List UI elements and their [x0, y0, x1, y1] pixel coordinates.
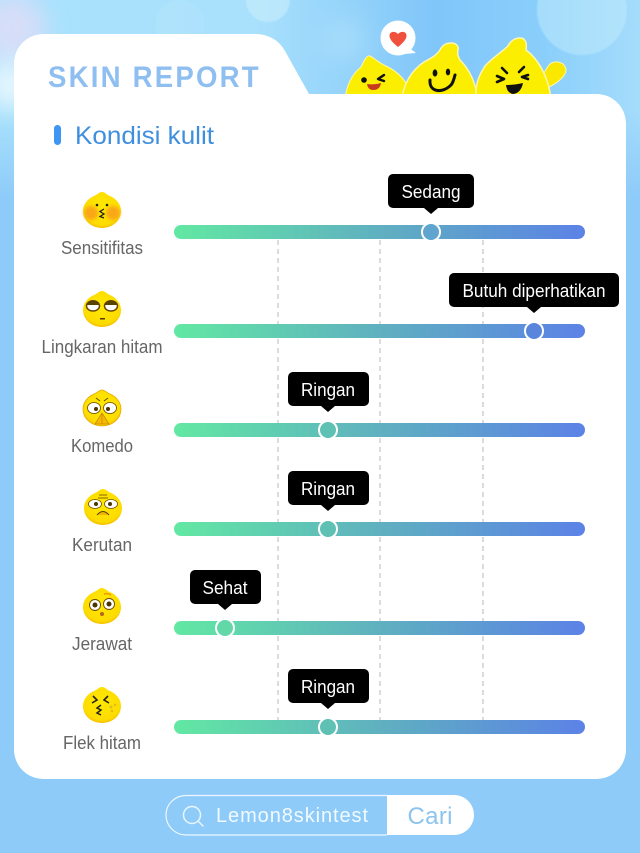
icon: magnifier	[184, 806, 203, 826]
row: Sensitifitas	[61, 174, 585, 258]
tooltip: Sehat	[190, 570, 261, 610]
slider track	[174, 324, 585, 338]
icon: tired eyes face	[83, 291, 121, 327]
icon: heart speech bubble	[380, 20, 416, 56]
mascot: smiling lemon	[402, 43, 478, 100]
icon: wrinkled worried face	[84, 489, 122, 525]
label: Kerutan	[72, 535, 132, 555]
slider track	[174, 621, 585, 635]
heading: Kondisi kulit: Kondisi kulit	[75, 122, 214, 150]
search button: Cari	[408, 803, 452, 830]
icon: squinting spotted face	[83, 687, 121, 723]
search text: Lemon8skintest	[216, 805, 368, 827]
tooltip: Butuh diperhatikan: Butuh diperhatikan	[462, 281, 606, 301]
tooltip: Sehat: Sehat	[202, 578, 248, 598]
label: Lingkaran hitam	[42, 337, 162, 357]
label: Flek hitam	[63, 733, 141, 753]
label: Komedo	[71, 436, 133, 456]
row: Flek hitam	[63, 669, 585, 753]
tooltip: Ringan	[288, 471, 369, 511]
slider thumb	[319, 421, 337, 439]
tooltip: Butuh diperhatikan	[449, 273, 619, 313]
slider track	[174, 720, 585, 734]
slider thumb	[525, 322, 543, 340]
search input outline	[166, 796, 387, 835]
label: Sensitifitas	[61, 238, 143, 258]
row: Jerawat	[72, 570, 585, 654]
search button	[387, 795, 474, 835]
slider thumb	[319, 718, 337, 736]
slider track	[174, 225, 585, 239]
tooltip: Sedang	[388, 174, 474, 214]
mascot: winking lemon	[345, 56, 407, 100]
background	[0, 0, 640, 172]
slider thumb	[216, 619, 234, 637]
tooltip: Sedang: Sedang	[402, 182, 460, 202]
icon: hands on nose face	[83, 390, 121, 426]
tooltip: Ringan: Ringan	[301, 380, 355, 400]
slider track	[174, 423, 585, 437]
scale grid lines	[278, 240, 483, 720]
tooltip: Ringan: Ringan	[301, 479, 355, 499]
row: Lingkaran hitam	[42, 273, 619, 357]
search bar	[166, 795, 474, 835]
title: SKIN REPORT	[48, 61, 259, 94]
mascot: laughing lemon waving	[476, 38, 566, 100]
tooltip: Ringan: Ringan	[301, 677, 355, 697]
tooltip: Ringan	[288, 669, 369, 709]
slider thumb	[319, 520, 337, 538]
icon: wide-eyed face	[83, 588, 121, 624]
slider thumb	[422, 223, 440, 241]
tooltip: Ringan	[288, 372, 369, 412]
slider track	[174, 522, 585, 536]
row: Kerutan	[72, 471, 585, 555]
row: Komedo	[71, 372, 585, 456]
label: Jerawat	[72, 634, 132, 654]
icon: blushing kissing face	[83, 192, 121, 228]
